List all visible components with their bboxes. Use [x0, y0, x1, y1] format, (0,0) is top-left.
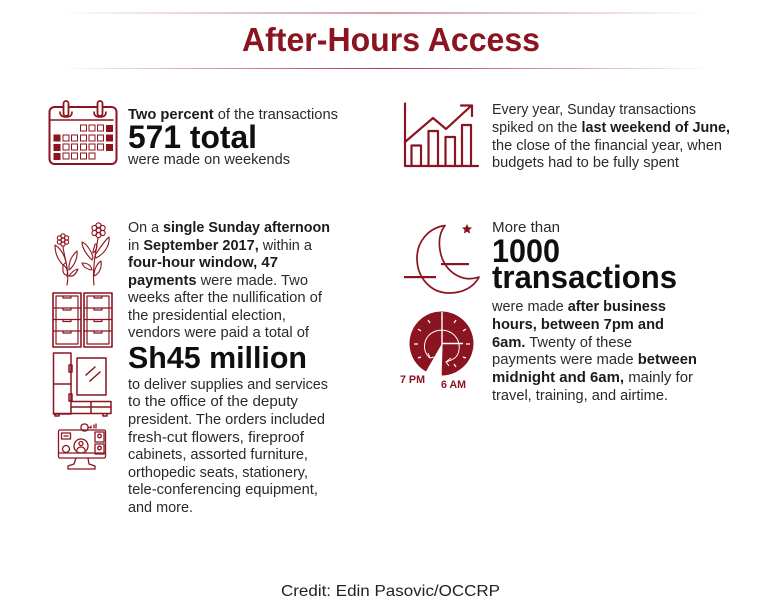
text: Sunday afternoon paragraph: vendors were paid a total of	[128, 324, 310, 341]
credit: Credit: Edin Pasovic/OCCRP	[281, 583, 500, 600]
text: two percent: 571 total	[128, 119, 257, 155]
text: Sunday afternoon paragraph: cabinets, assorted furniture,	[128, 446, 308, 463]
text: Sunday afternoon paragraph: fresh-cut flowers, fireproof	[128, 429, 305, 446]
text: two percent	[127, 106, 338, 168]
text: Sunday afternoon paragraph: in September 2017, within a	[128, 237, 313, 254]
text: two percent: were made on weekends	[127, 151, 290, 168]
text: Sunday afternoon paragraph: orthopedic seats, stationery,	[128, 464, 308, 481]
text: Sunday afternoon paragraph: On a single Sunday afternoon	[128, 219, 330, 236]
text: Sunday afternoon paragraph: to the office of the deputy	[128, 393, 298, 410]
icon: filing cabinets	[53, 293, 112, 347]
text: Sunday afternoon paragraph: the presidential election,	[128, 307, 286, 324]
text: two percent: Two percent of the transactions	[128, 106, 338, 123]
text: Sunday spikes	[492, 101, 730, 171]
icon: clock with 7 PM to 6 AM wedge	[409, 312, 473, 377]
text: Sunday afternoon paragraph: weeks after the nullification of	[127, 289, 323, 306]
label: 7 PM: 7 PM	[400, 374, 425, 386]
text: more than 1000 transactions: 6am. Twenty of these	[492, 334, 632, 351]
text: Sunday afternoon paragraph: four-hour window, 47	[128, 254, 278, 271]
text: Sunday afternoon paragraph	[127, 219, 330, 516]
icon: flowers	[55, 223, 109, 285]
text: Sunday afternoon paragraph: president. The orders included	[128, 411, 325, 428]
text: more than 1000 transactions	[491, 219, 697, 404]
icon: rising bar chart	[405, 104, 478, 166]
icon: furniture with mirror	[54, 353, 111, 416]
icon: tele-conferencing monitor	[58, 424, 106, 469]
text: Sunday afternoon paragraph: payments were made. Two	[128, 272, 308, 289]
text: more than 1000 transactions: hours, between 7pm and	[492, 316, 664, 333]
text: more than 1000 transactions: travel, training, and airtime.	[492, 387, 668, 404]
label: 6 AM: 6 AM	[441, 379, 466, 391]
text: more than 1000 transactions: were made after business	[491, 298, 666, 315]
text: Sunday spikes: spiked on the last weekend of June,	[492, 119, 730, 136]
text: more than 1000 transactions: midnight and 6am, mainly for	[492, 369, 693, 386]
text: Sunday afternoon paragraph: and more.	[128, 499, 193, 516]
text: more than 1000 transactions: More than	[492, 219, 560, 236]
text: Sunday spikes: budgets had to be fully spent	[492, 154, 680, 171]
text: Sunday spikes: the close of the financial year, when	[492, 137, 722, 154]
text: more than 1000 transactions: payments were made between	[492, 351, 697, 368]
icon: moon and star	[404, 224, 479, 293]
text: Sunday afternoon paragraph: tele-conferencing equipment,	[128, 481, 318, 498]
text: more than 1000 transactions: transactions	[492, 259, 677, 295]
text: Sunday spikes: Every year, Sunday transactions	[492, 101, 696, 118]
text: more than 1000 transactions: 1000	[492, 233, 560, 269]
text: Sunday afternoon paragraph: Sh45 million	[128, 340, 307, 375]
text: Sunday afternoon paragraph: to deliver supplies and services	[128, 376, 328, 393]
title: After-Hours Access	[242, 21, 540, 58]
icon: calendar	[50, 101, 116, 164]
